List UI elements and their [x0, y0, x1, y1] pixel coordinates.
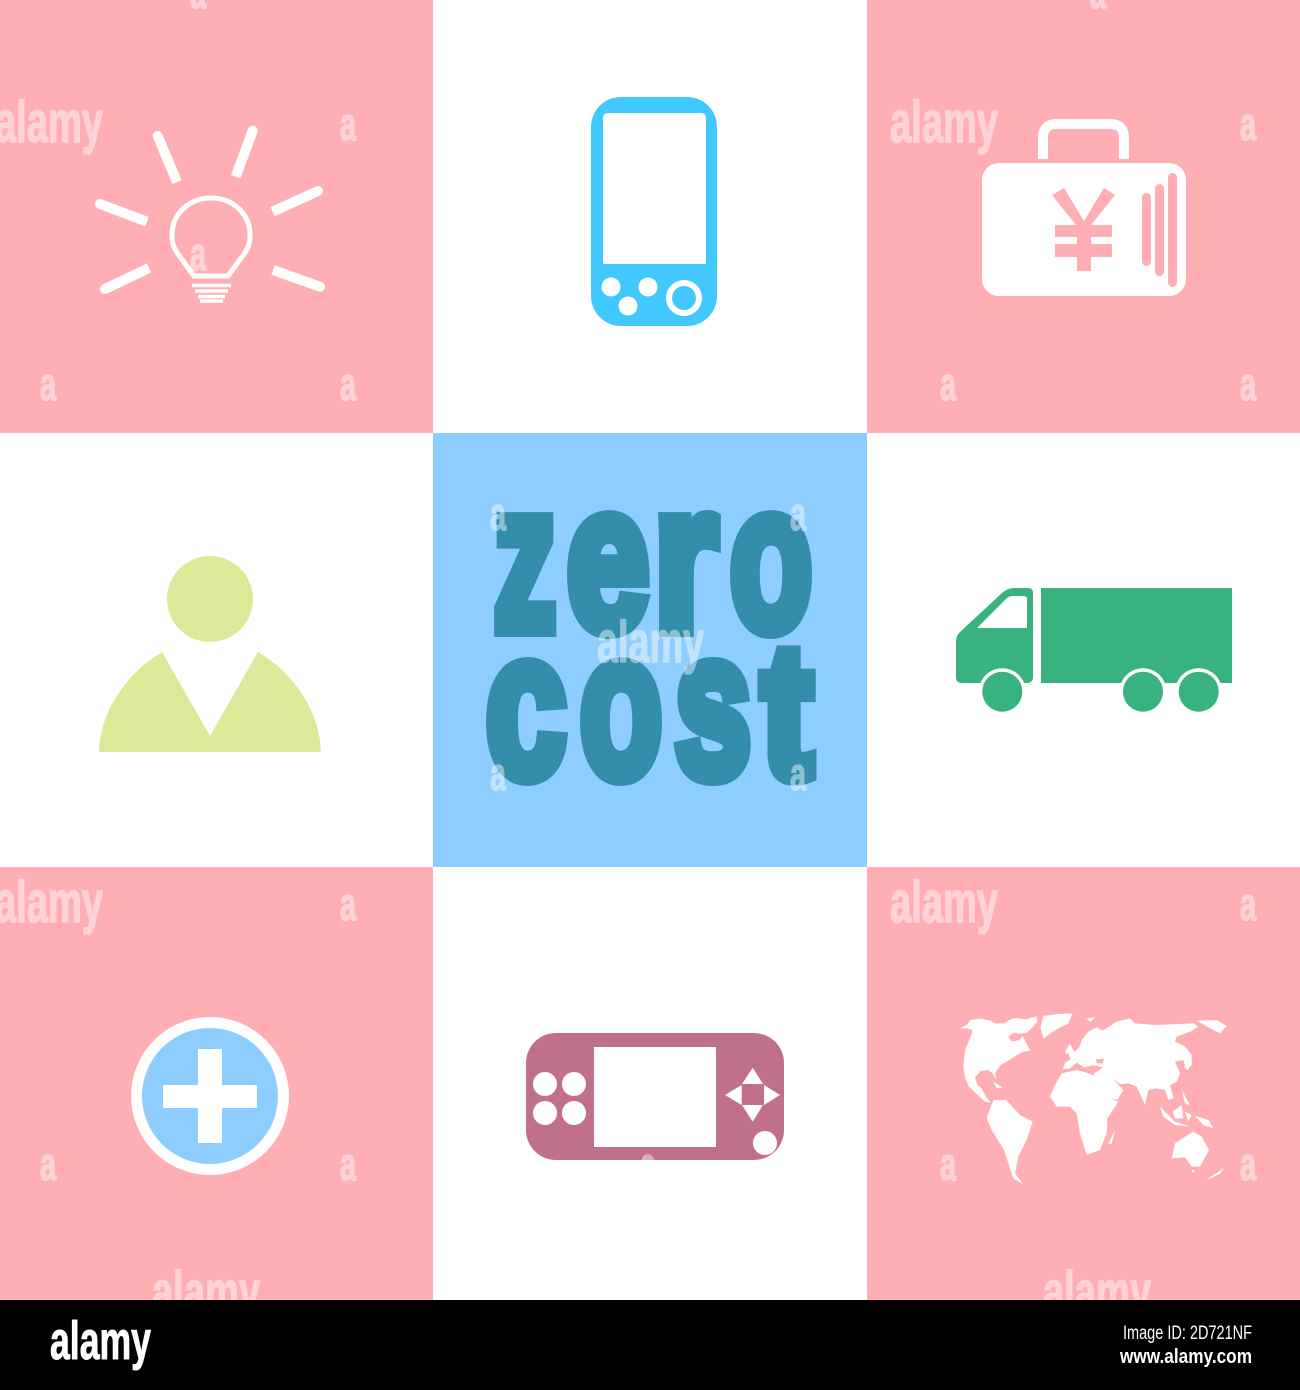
watermark: alamy repeats: a: [40, 358, 56, 410]
watermark: alamy repeats: a: [340, 98, 356, 150]
watermark: alamy repeats: alamy: [1043, 1260, 1151, 1325]
panel: top right briefcase: [867, 0, 1300, 433]
watermark: alamy repeats: a: [640, 1138, 656, 1190]
title: zero cost: s: [675, 590, 751, 820]
title: zero cost: t: [762, 606, 812, 816]
footer logo: alamy: [50, 1311, 151, 1371]
icon: plus button: [131, 1017, 289, 1175]
title: zero cost: e: [567, 443, 649, 673]
panel: bottom right world map: [867, 867, 1300, 1300]
watermark: alamy repeats: alamy: [152, 1260, 260, 1325]
panel: bottom left plus: [0, 867, 433, 1300]
image id: Image ID: 2D721NF: [1123, 1323, 1252, 1344]
watermark: alamy repeats: a: [1240, 358, 1256, 410]
icon: light bulb: [95, 126, 325, 301]
watermark: alamy repeats: a: [1240, 1138, 1256, 1190]
watermark: alamy repeats: a: [1240, 878, 1256, 930]
icon: handheld console: [526, 1033, 784, 1160]
panel: middle right truck: [867, 433, 1300, 867]
watermark: alamy repeats: a: [340, 1138, 356, 1190]
icon: truck: [956, 588, 1232, 715]
icon: mobile phone: [591, 97, 717, 326]
title: zero cost: o: [730, 443, 812, 673]
watermark: alamy repeats: a: [40, 1138, 56, 1190]
watermark: alamy repeats: a: [340, 878, 356, 930]
watermark: alamy repeats: a: [940, 1138, 956, 1190]
watermark: alamy repeats: alamy: [890, 870, 998, 935]
watermark: alamy repeats: alamy: [890, 90, 998, 155]
title: zero cost: c: [486, 590, 566, 820]
icon: person: [99, 556, 321, 752]
panel: middle left person: [0, 433, 433, 867]
watermark: alamy repeats: a: [340, 358, 356, 410]
title: zero cost: r: [654, 443, 717, 673]
panel: top left light bulb: [0, 0, 433, 433]
watermark: alamy repeats: a: [790, 488, 806, 540]
watermark: alamy repeats: a: [790, 748, 806, 800]
panel: top middle phone: [433, 0, 867, 433]
watermark: alamy repeats: alamy: [597, 610, 704, 675]
watermark: alamy repeats: a: [1240, 98, 1256, 150]
title: zero cost: z: [494, 443, 556, 673]
watermark: alamy repeats: a: [940, 358, 956, 410]
footer bar: [0, 1300, 1300, 1390]
icon: yen briefcase: [982, 124, 1186, 296]
icon: world map: [960, 1013, 1227, 1184]
watermark: alamy repeats: a: [490, 488, 506, 540]
panel: centre title: [433, 433, 867, 867]
title: zero cost: [486, 443, 812, 820]
title: zero cost: o: [580, 590, 662, 820]
website: www.alamy.com: [1119, 1346, 1252, 1368]
watermark: alamy repeats: a: [190, 228, 206, 280]
watermark: alamy repeats: a: [490, 748, 506, 800]
panel: bottom middle game console: [433, 867, 867, 1300]
